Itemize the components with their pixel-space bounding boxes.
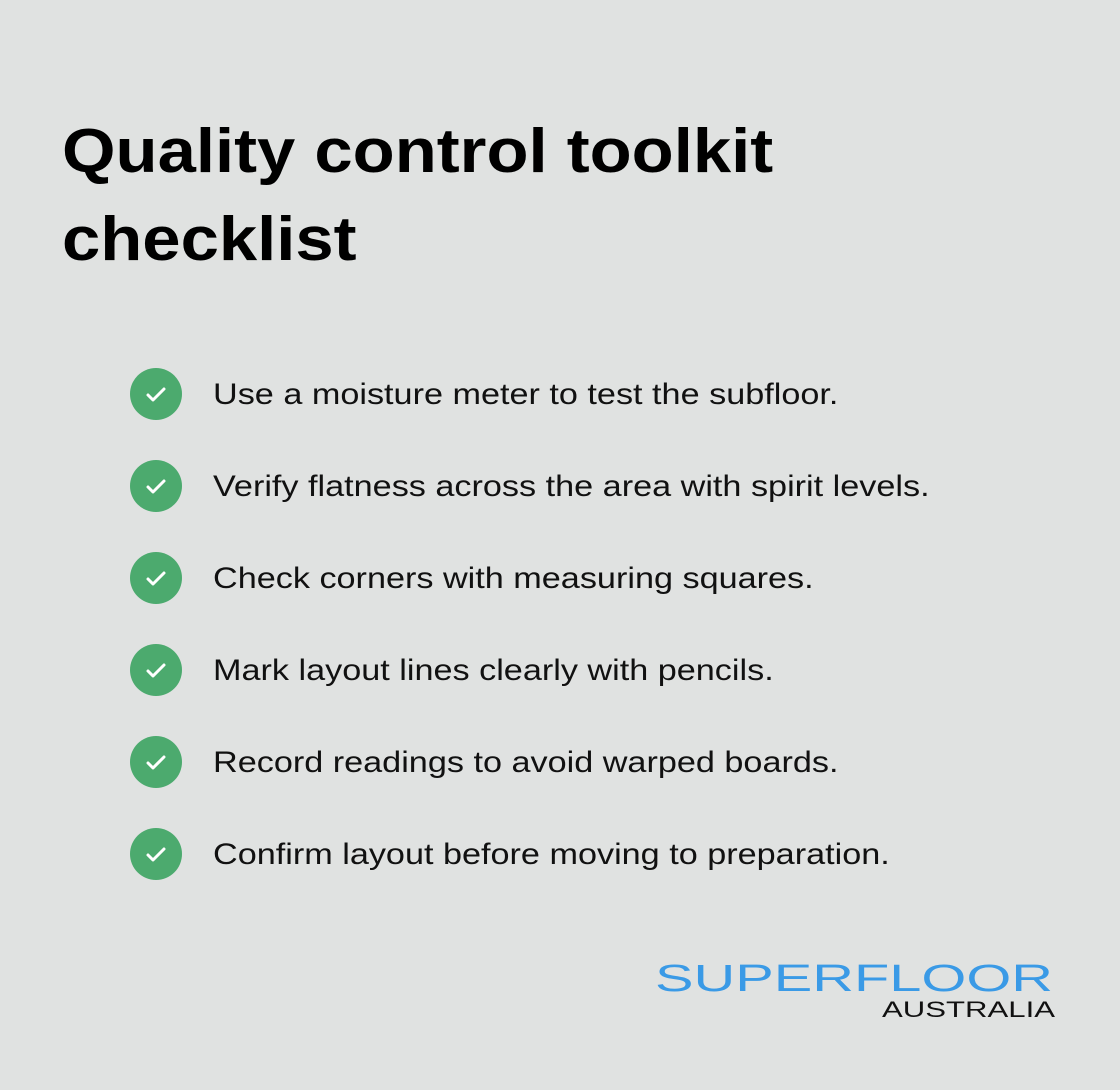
item 5: Record readings to avoid warped boards. — [213, 746, 838, 779]
item 2: Verify flatness across the area with spirit levels. — [213, 470, 930, 503]
item 6: Confirm layout before moving to preparation. — [213, 838, 890, 871]
logo: AUSTRALIA — [882, 997, 1055, 1022]
item 4 — [130, 644, 774, 696]
item 4: Mark layout lines clearly with pencils. — [213, 654, 774, 687]
checklist — [130, 368, 930, 880]
title — [62, 117, 773, 274]
title: Quality control toolkit — [62, 117, 773, 186]
item 6 — [130, 828, 890, 880]
logo — [655, 958, 1055, 1022]
item 3 — [130, 552, 814, 604]
item 3: Check corners with measuring squares. — [213, 562, 814, 595]
item 1: Use a moisture meter to test the subfloor. — [213, 378, 838, 411]
logo: SUPERFLOOR — [655, 958, 1053, 1000]
title: checklist — [62, 205, 357, 274]
item 1 — [130, 368, 838, 420]
item 5 — [130, 736, 838, 788]
item 2 — [130, 460, 930, 512]
